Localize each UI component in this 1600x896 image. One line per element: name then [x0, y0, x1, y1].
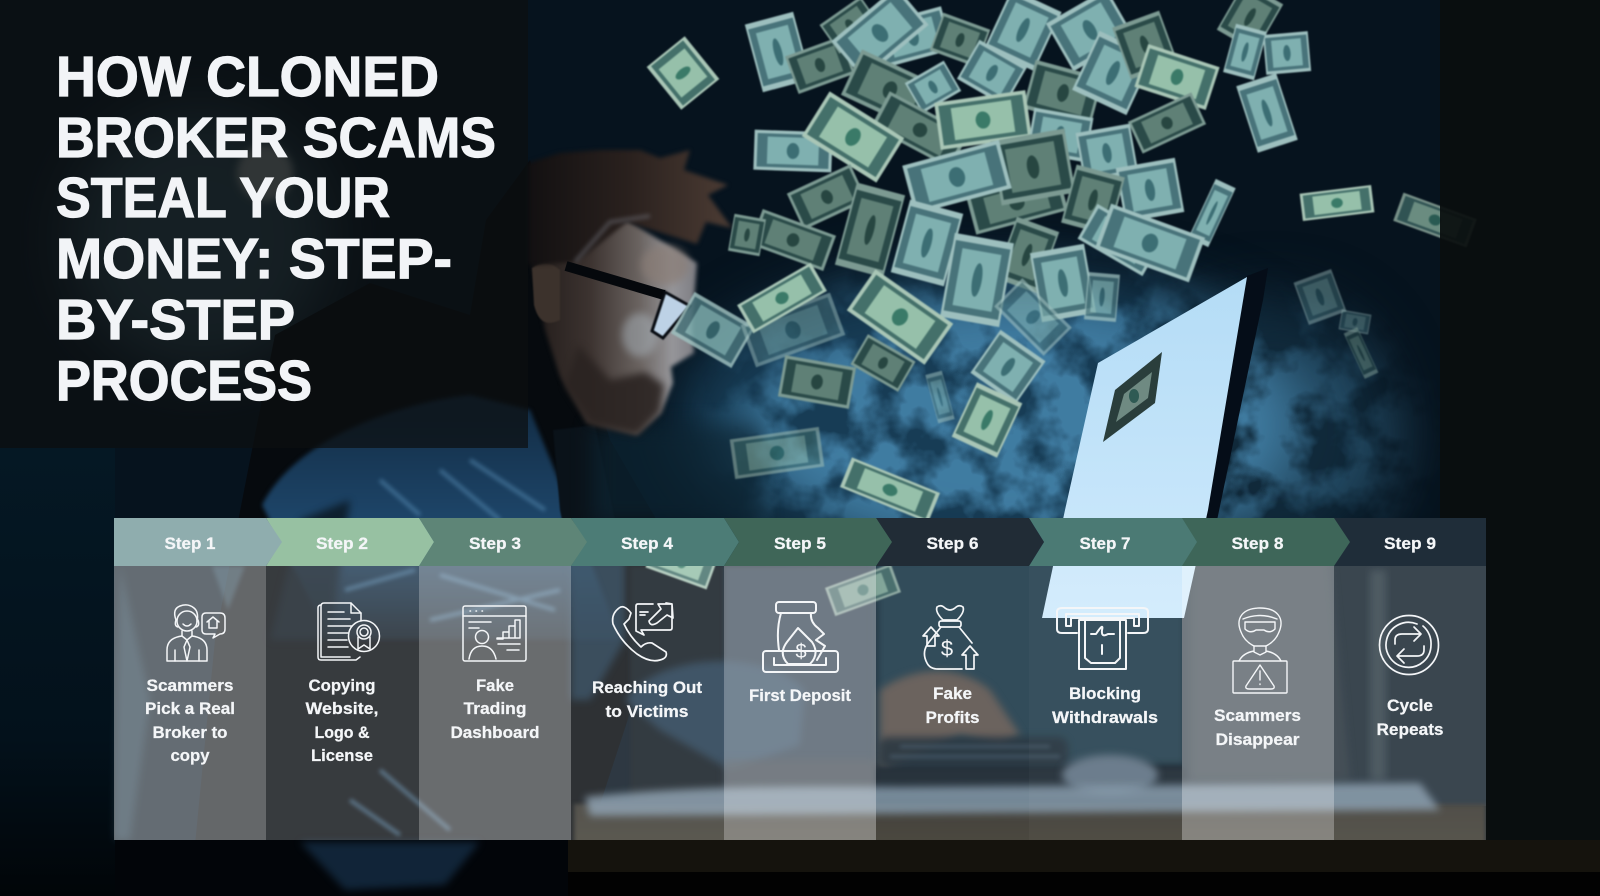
- hand and keyboard: [880, 671, 1020, 770]
- text: reaching out to victims: Reaching Out: [592, 678, 702, 697]
- panel: step 3: [419, 518, 587, 840]
- header: step 8: Step 8: [1232, 534, 1284, 553]
- header: step 6: [876, 518, 1044, 566]
- text: fake trading dashboard: [450, 676, 540, 742]
- header: step 7: [1029, 518, 1197, 566]
- icon: money bag: $: [941, 636, 953, 661]
- hood and back silhouette: [190, 160, 680, 896]
- text: copying website logo license: Copying: [308, 676, 376, 695]
- flying bills: [645, 0, 1477, 616]
- text: blocking withdrawals: Withdrawals: [1052, 708, 1158, 727]
- header: step 5: Step 5: [774, 534, 826, 553]
- panel: step 8: [1182, 518, 1350, 840]
- text: blocking withdrawals: Blocking: [1069, 684, 1141, 703]
- text: fake trading dashboard: Trading: [464, 699, 526, 718]
- icon: certified document: [318, 603, 380, 660]
- panel: step 4: [571, 518, 739, 840]
- icon: hand depositing money: [763, 602, 838, 672]
- text: scammers pick a real broker: Pick a Real: [145, 699, 235, 718]
- text: scammers pick a real broker: Broker to: [152, 723, 228, 742]
- text: scammers disappear: Scammers: [1214, 706, 1301, 725]
- text: copying website logo license: License: [311, 746, 373, 765]
- header: step 2: Step 2: [316, 534, 368, 553]
- text: blocking withdrawals: [1052, 684, 1158, 727]
- title panel: [0, 0, 528, 448]
- text: copying website logo license: Logo &: [314, 723, 370, 742]
- panel: step 5: [724, 518, 892, 840]
- monitor stand and room: [876, 560, 1186, 765]
- header: step 6: Step 6: [926, 534, 978, 553]
- header: step 3: [419, 518, 587, 566]
- text: fake profits: [926, 684, 980, 727]
- man's head: [528, 150, 732, 435]
- text: cycle repeats: [1376, 696, 1444, 739]
- header: step 4: [571, 518, 739, 566]
- title: [56, 45, 496, 413]
- header: step 5: [724, 518, 892, 566]
- icon: trading dashboard: [463, 606, 526, 661]
- icon: hooded hacker: [1233, 608, 1287, 693]
- header: step 1: Step 1: [164, 534, 216, 553]
- title: PROCESS: [56, 349, 312, 413]
- icon: cycle: [1380, 616, 1438, 674]
- title: STEAL YOUR: [56, 166, 390, 230]
- text: first deposit: First Deposit: [749, 686, 851, 705]
- icon: hand depositing money: $: [795, 641, 807, 663]
- header: step 7: Step 7: [1080, 534, 1130, 553]
- header: step 4: Step 4: [621, 534, 674, 553]
- text: fake trading dashboard: Dashboard: [450, 723, 540, 742]
- panel: step 6: [876, 518, 1044, 840]
- header: step 2: [266, 518, 434, 566]
- text: scammers disappear: Disappear: [1216, 730, 1300, 749]
- text: scammers disappear: [1214, 706, 1301, 749]
- sleeve under step 4 and 5: [571, 560, 625, 700]
- title: BROKER SCAMS: [56, 106, 496, 170]
- text: cycle repeats: Repeats: [1376, 720, 1444, 739]
- text: scammers pick a real broker: copy: [170, 746, 210, 765]
- text: copying website logo license: [306, 676, 378, 765]
- icon: blocked withdrawal slot: [1057, 608, 1148, 669]
- icon: scammer with real broker speech bubble: [167, 605, 225, 661]
- panel: step 9: [1334, 518, 1486, 840]
- header: step 8: [1182, 518, 1350, 566]
- header: step 1: [114, 518, 282, 566]
- header: step 9: [1334, 518, 1486, 566]
- icon: phone and message: [613, 603, 673, 661]
- desk: [574, 804, 1486, 844]
- icon: money bag: [923, 606, 978, 669]
- panel: step 1: [114, 518, 282, 840]
- text: scammers pick a real broker: [145, 676, 235, 765]
- text: cycle repeats: Cycle: [1387, 696, 1433, 715]
- text: reaching out to victims: to Victims: [606, 702, 688, 721]
- text: fake trading dashboard: Fake: [476, 676, 514, 695]
- title: HOW CLONED: [56, 45, 439, 109]
- left wall glow: [70, 110, 330, 370]
- panel: step 2: [266, 518, 434, 840]
- text: copying website logo license: Website,: [306, 699, 378, 718]
- jacket: [262, 395, 620, 640]
- text: fake profits: Fake: [933, 684, 972, 703]
- title: MONEY: STEP-: [56, 227, 452, 291]
- text: scammers pick a real broker: Scammers: [146, 676, 234, 695]
- text: fake profits: Profits: [926, 708, 980, 727]
- dark right band: [1440, 0, 1600, 896]
- header: step 3: Step 3: [469, 534, 521, 553]
- title: BY-STEP: [56, 288, 295, 352]
- monitor: [1190, 268, 1268, 566]
- header: step 9: Step 9: [1384, 534, 1436, 553]
- panel: step 7: [1029, 518, 1197, 840]
- text: reaching out to victims: [592, 678, 702, 721]
